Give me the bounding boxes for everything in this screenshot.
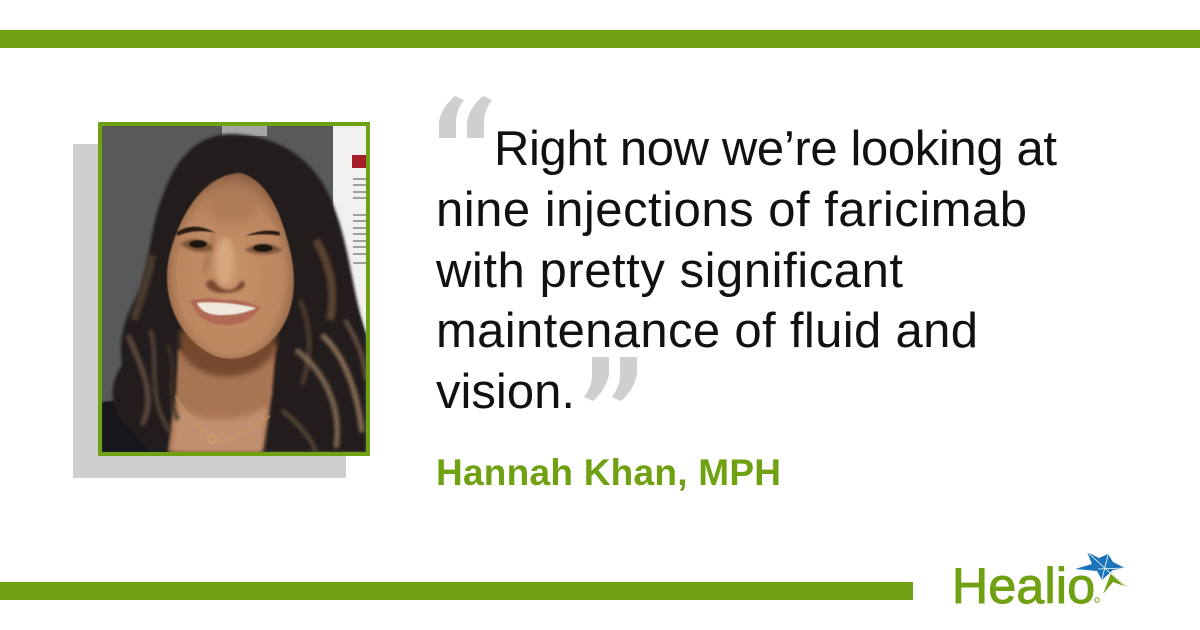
- portrait photo of Hannah Khan: [100, 124, 368, 454]
- quote text: [435, 122, 1057, 419]
- gray offset panel behind photo: [73, 144, 346, 478]
- opening quotation mark: [439, 96, 492, 138]
- bottom green bar: [0, 582, 913, 600]
- quote text: with pretty significant: [435, 244, 903, 298]
- top green bar: [0, 30, 1200, 48]
- quote text: maintenance of fluid and: [436, 304, 978, 358]
- attribution name: Hannah Khan, MPH: [436, 452, 781, 493]
- quote text: Right now we’re looking at: [494, 122, 1057, 176]
- photo green frame: [100, 124, 368, 454]
- quote text: nine injections of faricimab: [436, 183, 1027, 237]
- quote text: vision.: [436, 365, 575, 419]
- closing quotation mark: [584, 357, 637, 401]
- Healio logo: Healio: [952, 558, 1095, 614]
